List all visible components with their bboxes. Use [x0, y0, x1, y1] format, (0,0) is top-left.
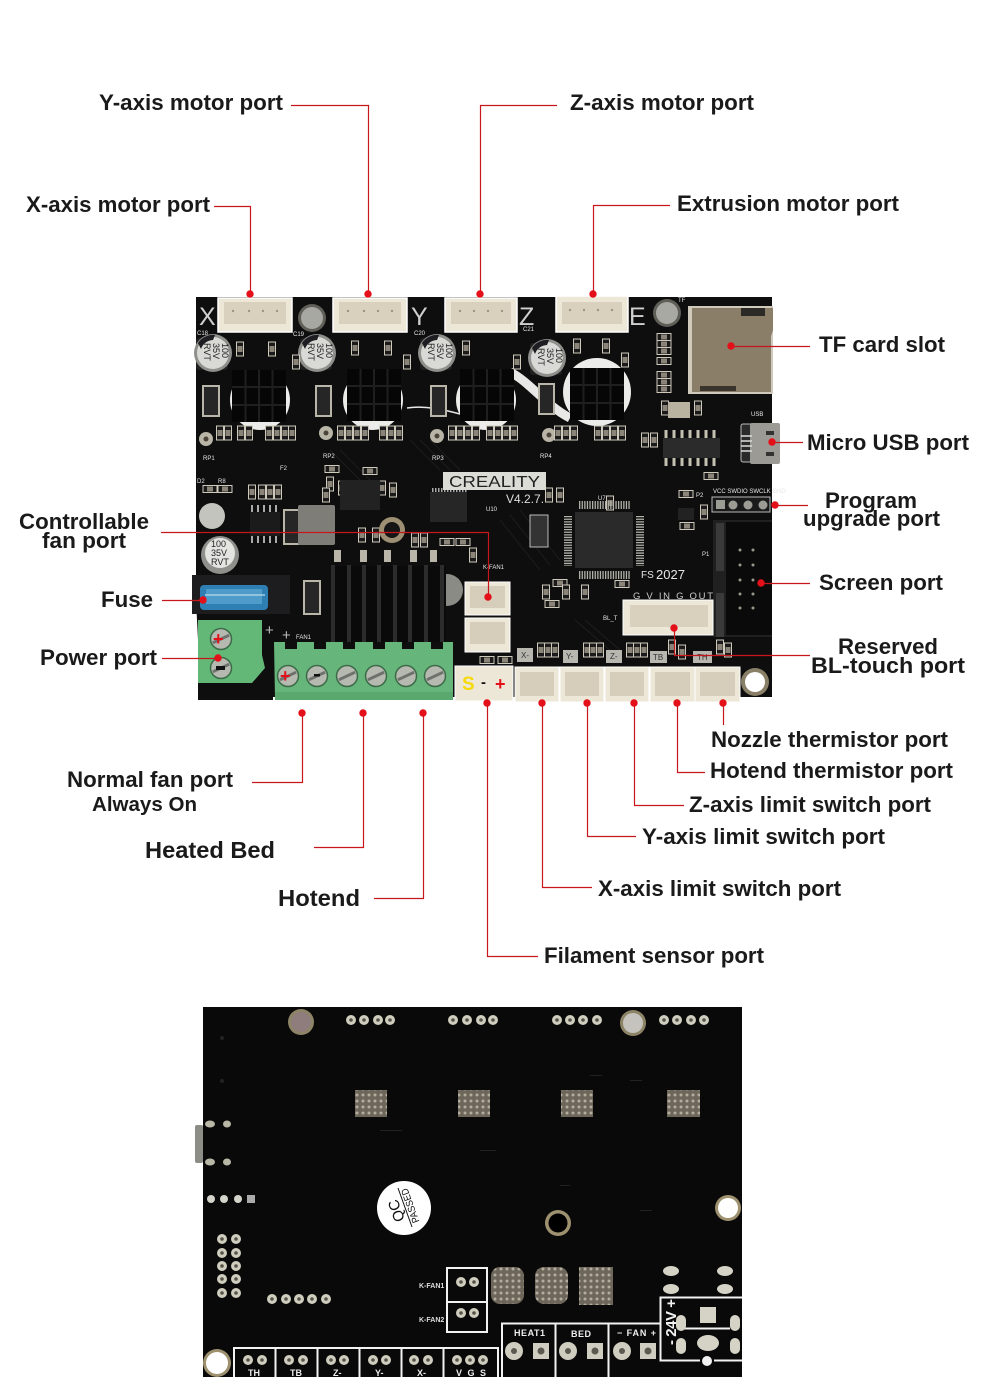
- callout: Nozzle thermistor port: [711, 699, 949, 752]
- callout: Z-axis motor port: [476, 90, 755, 298]
- capacitors: 35V: [315, 343, 325, 359]
- limit switch tags: Y-: [566, 652, 574, 661]
- driver thermal pads: [355, 1090, 700, 1117]
- callout: Z-axis motor port: Z-axis motor port: [570, 90, 755, 115]
- callout: Y-axis motor port: Y-axis motor port: [99, 90, 284, 115]
- board silk labels: G V IN G OUT: [633, 591, 713, 602]
- heater and fan connector block: HEAT1: [514, 1328, 545, 1338]
- program header pads: [207, 1195, 255, 1203]
- back vias: [220, 1036, 652, 1211]
- limit switch tags: TB: [653, 653, 663, 662]
- QC passed sticker: QC: [385, 1197, 409, 1224]
- motor connectors: [218, 296, 628, 332]
- CREALITY logo plate: [443, 472, 546, 506]
- thermal paste blobs: [230, 358, 631, 430]
- board silk labels: 2027: [656, 567, 685, 582]
- ICs and inductor: [250, 402, 720, 575]
- trim pots and SMD parts: [199, 334, 732, 664]
- capacitors: 100: [444, 343, 454, 358]
- motor axis silk letters: [199, 303, 646, 331]
- CREALITY logo plate: CREALITY: [449, 474, 540, 491]
- CREALITY logo plate: V4.2.7.: [506, 492, 544, 506]
- callout: Controllable fan port: Controllable: [19, 509, 149, 534]
- diodes: [203, 384, 554, 614]
- bottom connector row: TH: [248, 1368, 260, 1378]
- callout: Y-axis limit switch port: Y-axis limit switch port: [642, 824, 886, 849]
- heater and fan connector block: [502, 1324, 660, 1377]
- callout: TF card slot: TF card slot: [819, 332, 946, 357]
- callout: Z-axis limit switch port: [630, 699, 932, 817]
- board silk labels: RP4: [540, 454, 552, 460]
- heater and fan connector block: BED: [571, 1329, 592, 1339]
- power connector: +: [213, 629, 224, 649]
- micro USB: [741, 423, 780, 464]
- filament sensor marks: S: [462, 674, 475, 695]
- board silk labels: K-FAN1: [483, 565, 505, 571]
- heater and fan connector block: − FAN +: [617, 1328, 656, 1338]
- callout: X-axis limit switch port: X-axis limit switch port: [598, 876, 842, 901]
- silk traces hatch: [330, 440, 620, 650]
- K-FAN box: K-FAN2: [419, 1317, 444, 1324]
- board silk labels: C19: [293, 332, 305, 338]
- MOSFET heatsink: [331, 550, 446, 644]
- motor axis silk letters: Y: [411, 303, 428, 331]
- capacitors: [194, 334, 566, 574]
- callout: Heated Bed: Heated Bed: [145, 837, 275, 863]
- 24V power block: - 24V +: [663, 1299, 680, 1345]
- QC passed sticker: PASSED: [400, 1187, 422, 1224]
- bottom connector row: V G S: [456, 1368, 486, 1378]
- callout: Power port: Power port: [40, 645, 158, 670]
- motor axis silk letters: X: [199, 303, 216, 331]
- bottom connectors: [455, 666, 740, 702]
- standoffs: [199, 299, 681, 606]
- BL-touch connector: [623, 600, 713, 635]
- QC passed sticker: [377, 1181, 431, 1235]
- capacitors: 100: [211, 539, 226, 549]
- capacitors: 100: [554, 348, 564, 363]
- capacitors: 100: [220, 343, 230, 358]
- callout: Controllable fan port: fan port: [42, 528, 127, 553]
- callout: Hotend: [278, 709, 427, 911]
- board silk labels: RP1: [203, 456, 215, 462]
- bottom connector row: TB: [290, 1368, 302, 1378]
- capacitors: RVT: [202, 343, 212, 361]
- limit switch tags: [517, 648, 712, 663]
- motor axis silk letters: Z: [519, 303, 534, 331]
- 24V power block: [660, 1266, 742, 1366]
- board silk labels: +: [282, 627, 291, 644]
- limit switch tags: X-: [521, 651, 529, 660]
- callout: Y-axis motor port: [99, 90, 372, 298]
- capacitors: RVT: [211, 557, 229, 567]
- K-FAN box: K-FAN1: [419, 1283, 444, 1290]
- six-way terminal block: +: [280, 666, 291, 686]
- fuse: [192, 575, 290, 614]
- back substrate: [203, 1007, 742, 1377]
- mounting holes: [203, 1009, 741, 1377]
- capacitors: RVT: [536, 348, 546, 366]
- board silk labels: BL_T: [603, 616, 618, 622]
- board silk labels: RP2: [323, 454, 335, 460]
- board silk labels: P1: [702, 552, 710, 558]
- callout: Hotend: Hotend: [278, 885, 360, 911]
- callout: Nozzle thermistor port: Nozzle thermistor port: [711, 727, 949, 752]
- callout: X-axis motor port: X-axis motor port: [26, 192, 211, 217]
- capacitors: 35V: [211, 548, 227, 558]
- board silk labels: FS: [641, 570, 654, 581]
- capacitors: RVT: [426, 343, 436, 361]
- callout: Extrusion motor port: [589, 191, 900, 298]
- callout: Hotend thermistor port: [673, 699, 954, 783]
- board silk labels: D2: [197, 479, 205, 485]
- callout: Reserved BL-touch port: BL-touch port: [811, 653, 966, 678]
- driver heatsinks: [232, 368, 624, 422]
- bottom connector row: X-: [417, 1368, 426, 1378]
- capacitors: RVT: [306, 343, 316, 361]
- limit switch tags: TH: [697, 653, 708, 662]
- board substrate: [196, 297, 772, 700]
- callout: Filament sensor port: Filament sensor port: [544, 943, 765, 968]
- callout: Hotend thermistor port: Hotend thermistor port: [710, 758, 954, 783]
- callout: X-axis limit switch port: [538, 699, 842, 901]
- callout: Program upgrade port: upgrade port: [803, 506, 941, 531]
- screen header pads: [217, 1234, 241, 1298]
- board silk labels: FAN1: [296, 635, 312, 641]
- TF card slot: [688, 306, 773, 394]
- standoff bottom right: [379, 517, 769, 696]
- callout: Reserved BL-touch port: [670, 624, 966, 678]
- bottom connector row: [234, 1348, 498, 1378]
- callout: Controllable fan port: [19, 509, 492, 601]
- callout: TF card slot: [727, 332, 946, 357]
- board silk labels: P2: [696, 493, 704, 499]
- board silk labels: C21: [523, 327, 535, 333]
- callout: Normal fan port Always On: Always On: [92, 794, 197, 816]
- callout: Fuse: [101, 587, 207, 612]
- callout: Fuse: Fuse: [101, 587, 153, 612]
- motor solder pads: [346, 1015, 709, 1025]
- bottom connector row: Y-: [375, 1368, 384, 1378]
- board silk labels: TF: [678, 298, 686, 304]
- callout: Heated Bed: [145, 709, 367, 863]
- motor axis silk letters: E: [629, 303, 646, 331]
- callout: Micro USB port: Micro USB port: [807, 430, 970, 455]
- capacitors: 100: [324, 343, 334, 358]
- board silk labels: RP3: [432, 456, 444, 462]
- bottom connector row: Z-: [333, 1368, 342, 1378]
- MOSFET textured pads: [491, 1267, 613, 1305]
- BL-touch pads: [267, 1294, 331, 1304]
- board silk labels: [197, 298, 786, 644]
- board silk labels: C20: [414, 331, 426, 337]
- board silk labels: C18: [197, 331, 209, 337]
- board silk labels: +: [265, 622, 274, 639]
- callout: Screen port: Screen port: [819, 570, 944, 595]
- filament sensor marks: [462, 674, 506, 695]
- callout: Program upgrade port: Program: [825, 488, 917, 513]
- screen port: [713, 520, 772, 637]
- filament sensor marks: -: [481, 674, 486, 691]
- board silk labels: U10: [486, 507, 498, 513]
- capacitors: 35V: [211, 343, 221, 359]
- callout: Filament sensor port: [483, 699, 765, 968]
- program header: [712, 497, 770, 512]
- callout: Power port: [40, 645, 222, 670]
- callout: Y-axis limit switch port: [583, 699, 886, 849]
- capacitors: 35V: [545, 348, 555, 364]
- panel: front of control board: [192, 296, 786, 702]
- board silk labels: VCC SWDIO SWCLK GND: [713, 489, 786, 495]
- callout: Screen port: [757, 570, 944, 595]
- filament sensor marks: +: [495, 674, 506, 694]
- callout: Program upgrade port: [771, 488, 941, 531]
- power connector: [198, 620, 265, 683]
- callout: Normal fan port Always On: [67, 709, 306, 816]
- panel: back of control board: [195, 1007, 742, 1378]
- limit switch tags: Z-: [610, 652, 618, 661]
- board silk labels: USB: [751, 412, 763, 418]
- callout: Normal fan port Always On: Normal fan port: [67, 767, 234, 792]
- callout: Reserved BL-touch port: Reserved: [838, 634, 938, 659]
- callout: Z-axis limit switch port: Z-axis limit switch port: [689, 792, 932, 817]
- K-FAN box: [419, 1268, 487, 1332]
- board silk labels: F2: [280, 466, 288, 472]
- callout: Extrusion motor port: Extrusion motor port: [677, 191, 900, 216]
- six-way terminal block: [274, 642, 453, 700]
- board silk labels: R8: [218, 479, 226, 485]
- capacitors: 35V: [435, 343, 445, 359]
- K-fan connectors: [465, 582, 510, 652]
- board silk labels: U7: [598, 496, 606, 502]
- USB side pads: [195, 1120, 231, 1166]
- callout: X-axis motor port: [26, 192, 254, 298]
